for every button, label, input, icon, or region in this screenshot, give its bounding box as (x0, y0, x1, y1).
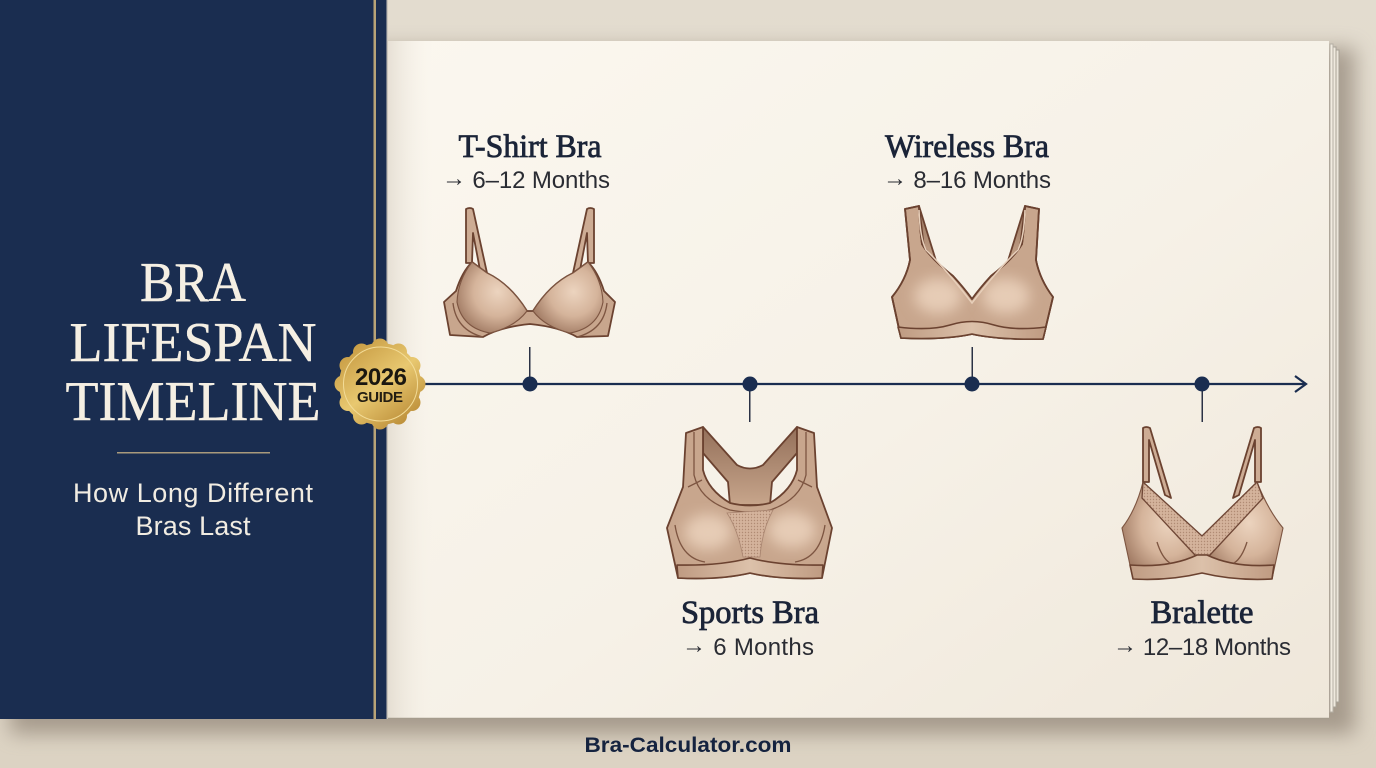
title: LIFESPAN (70, 312, 316, 374)
label: bralette (1113, 595, 1291, 661)
label: sports bra (681, 595, 819, 661)
icon: bralette (1122, 427, 1283, 579)
label: sports bra: → (682, 632, 706, 659)
label: wireless bra: Wireless Bra (885, 129, 1049, 165)
icon: sports bra (667, 427, 832, 578)
label: bralette: 12–18 Months (1137, 634, 1291, 661)
label: t-shirt bra: T-Shirt Bra (458, 129, 602, 165)
label: t-shirt bra: → (442, 165, 466, 192)
badge: 2026 guide (334, 338, 426, 430)
label: wireless bra: 8–16 Months (907, 167, 1051, 194)
label: sports bra: Sports Bra (681, 595, 819, 631)
label: wireless bra (883, 129, 1051, 194)
footer website: Bra-Calculator.com (584, 734, 792, 757)
paper page panel (388, 41, 1329, 718)
badge: 2026 guide: GUIDE (357, 389, 403, 406)
label: wireless bra: → (883, 165, 907, 192)
label: sports bra: 6 Months (706, 634, 814, 661)
icon: t-shirt bra (444, 208, 615, 337)
title divider (117, 452, 270, 454)
title: TIMELINE (66, 371, 320, 433)
page stack edge (1330, 44, 1339, 712)
subtitle: How Long Different (73, 478, 313, 508)
label: t-shirt bra: 6–12 Months (466, 167, 610, 194)
label: bralette: Bralette (1150, 595, 1254, 631)
navy cover panel (0, 0, 388, 719)
subtitle: Bras Last (136, 511, 251, 541)
badge: 2026 guide: 2026 (355, 364, 407, 391)
subtitle (73, 478, 313, 541)
title (66, 252, 320, 433)
label: bralette: → (1113, 632, 1137, 659)
title: BRA (140, 252, 247, 314)
timeline axis with arrow (420, 376, 1306, 392)
icon: wireless bra (892, 206, 1053, 339)
timeline markers (522, 347, 1210, 422)
label: t-shirt bra (442, 129, 610, 194)
